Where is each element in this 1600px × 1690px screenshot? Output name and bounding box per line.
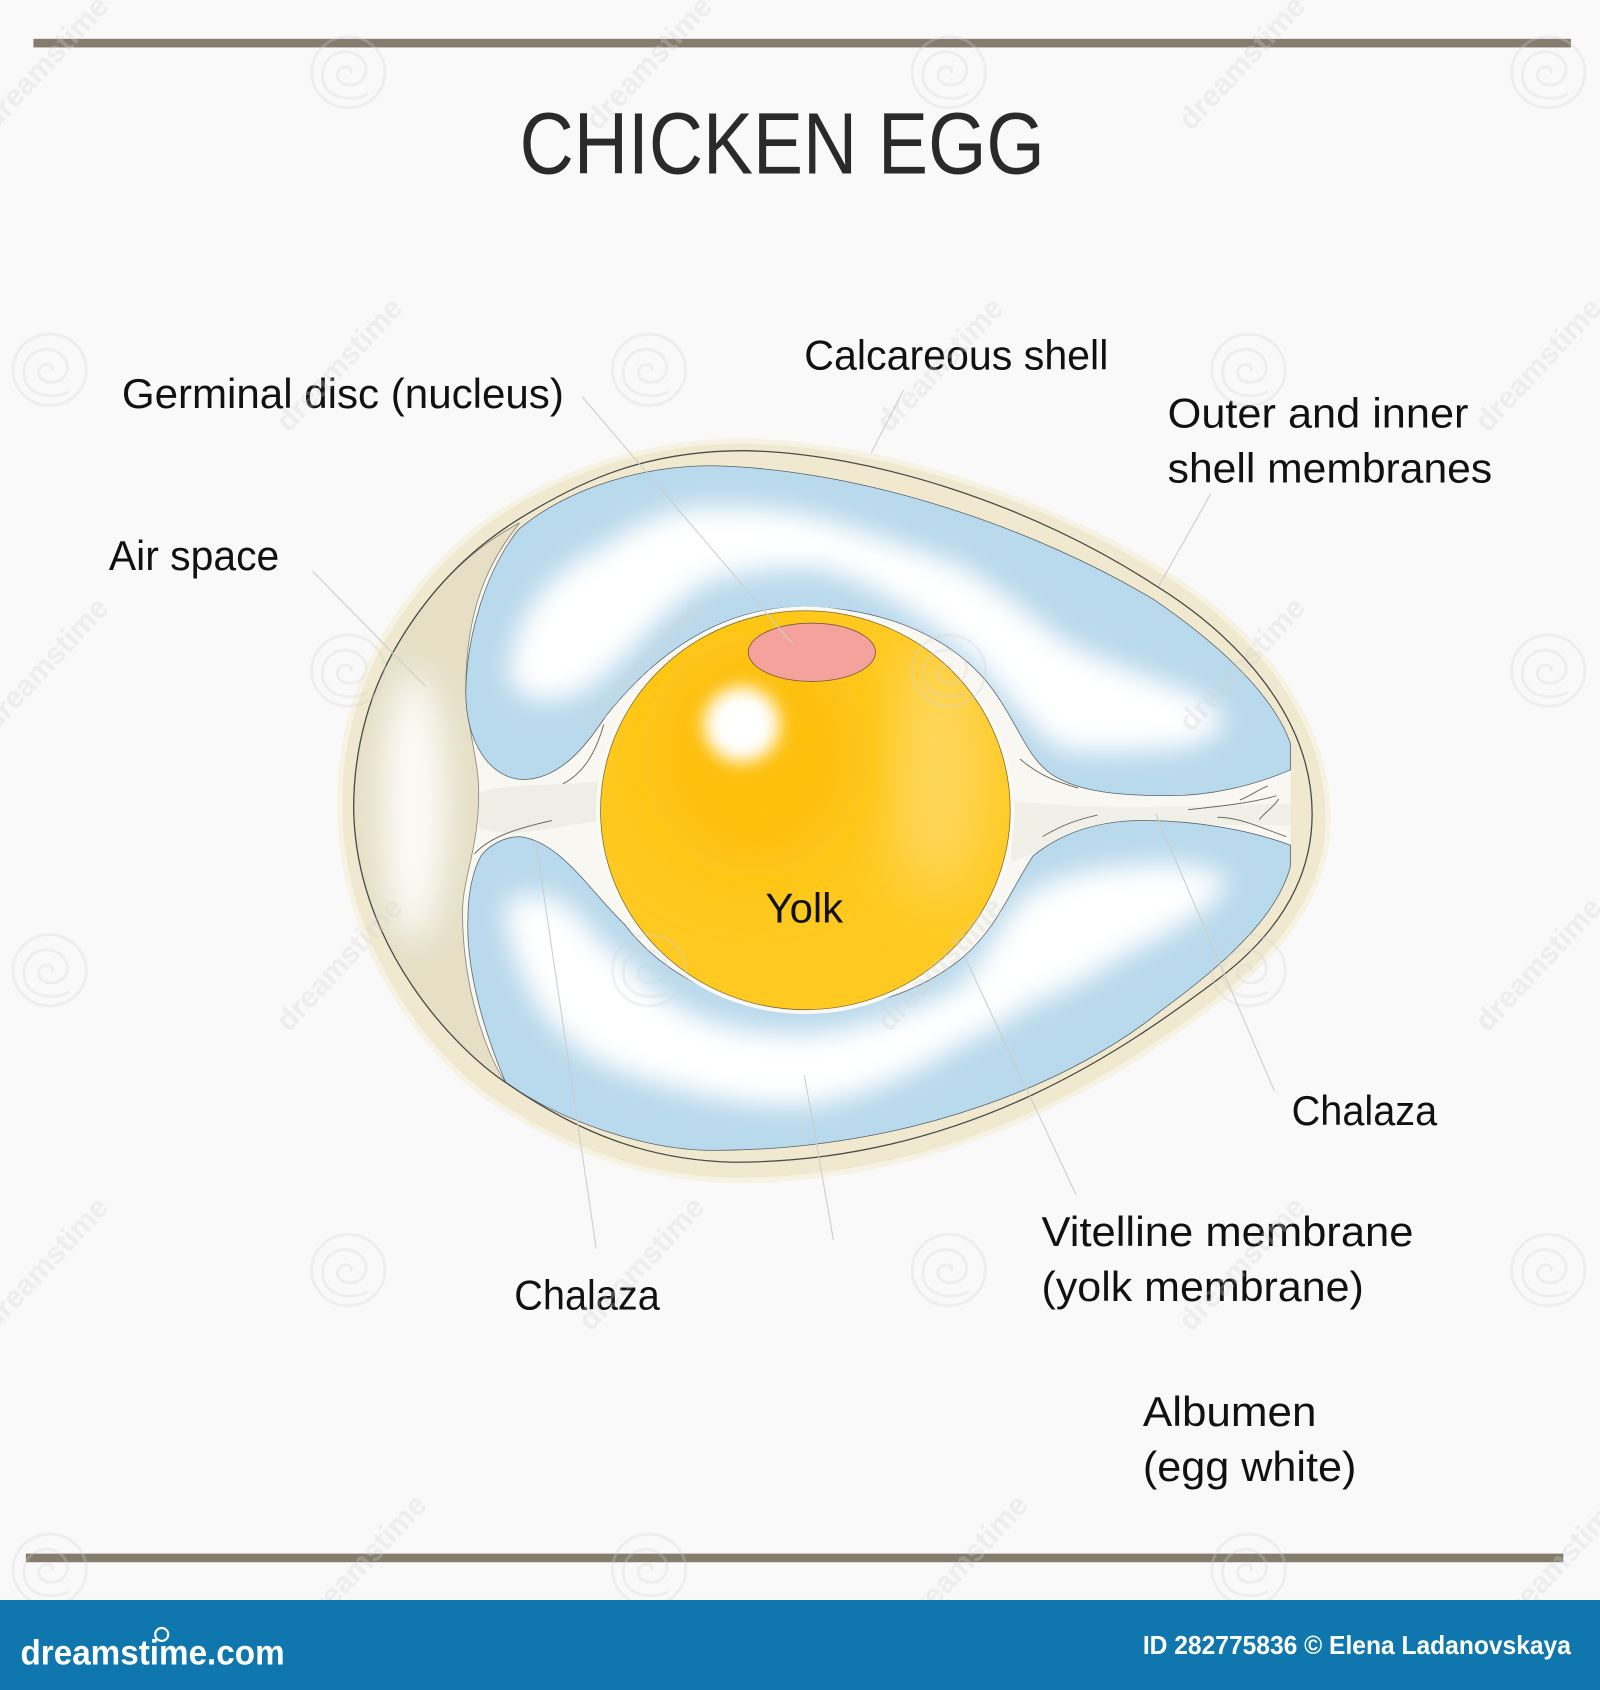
label: calcareous shell: Calcareous shell	[804, 331, 1108, 378]
label: chalaza left: Chalaza	[514, 1271, 660, 1318]
outer and inner shell membranes	[354, 451, 1312, 1162]
footer bar	[0, 1600, 1600, 1690]
watermark pattern: dreamstime	[895, 1489, 1035, 1635]
watermark pattern: dreamstime	[870, 292, 1010, 438]
watermark pattern: dreamstime	[270, 292, 410, 438]
chalaza bands	[479, 781, 1291, 863]
label: air space: Air space	[109, 532, 279, 579]
watermark pattern: dreamstime	[1172, 592, 1312, 738]
watermark pattern: dreamstime	[294, 1489, 433, 1635]
vitelline membrane and yolk	[596, 606, 1015, 1014]
watermark pattern: dreamstime	[270, 891, 410, 1038]
watermark pattern: dreamstime	[572, 592, 711, 738]
label: outer and inner shell membranes: Outer and inner	[1168, 389, 1468, 436]
label: outer and inner shell membranes: shell membranes	[1168, 444, 1492, 491]
yolk deep core	[642, 631, 868, 879]
label: vitelline membrane: (yolk membrane)	[1042, 1263, 1364, 1310]
albumen lower lobe	[453, 814, 1305, 1164]
shell: calcareous outer halo	[340, 441, 1328, 1181]
yolk highlight	[704, 687, 780, 762]
label: albumen: Albumen	[1143, 1388, 1316, 1435]
yolk pale band	[891, 641, 985, 900]
leader lines	[313, 390, 1274, 1248]
label: yolk: Yolk	[765, 884, 844, 931]
watermark pattern: dreamstime	[1172, 1191, 1312, 1337]
watermark pattern: dreamstime	[572, 1191, 711, 1337]
label: vitelline membrane	[1042, 1208, 1413, 1310]
label: albumen	[1143, 1388, 1356, 1490]
germinal disc	[748, 623, 875, 681]
chalaza strands	[474, 725, 1286, 854]
egg interior: thin albumen	[462, 466, 1291, 1150]
label: vitelline membrane: Vitelline membrane	[1042, 1208, 1413, 1255]
footer logo: dreamstime.com	[20, 1633, 285, 1673]
title: CHICKEN EGG	[520, 95, 1045, 193]
label: chalaza right: Chalaza	[1292, 1087, 1438, 1134]
label: germinal disc: Germinal disc (nucleus)	[122, 370, 564, 417]
albumen upper lobe	[453, 453, 1305, 809]
egg diagram	[340, 441, 1328, 1181]
footer credit: ID 282775836 © Elena Ladanovskaya	[1143, 1632, 1571, 1660]
watermark pattern: dreamstime	[870, 891, 1010, 1038]
top rule	[33, 39, 1571, 47]
label: albumen: (egg white)	[1143, 1443, 1356, 1490]
bottom rule	[26, 1554, 1563, 1562]
label: outer and inner shell membranes	[1168, 389, 1492, 491]
air space	[354, 523, 520, 1082]
